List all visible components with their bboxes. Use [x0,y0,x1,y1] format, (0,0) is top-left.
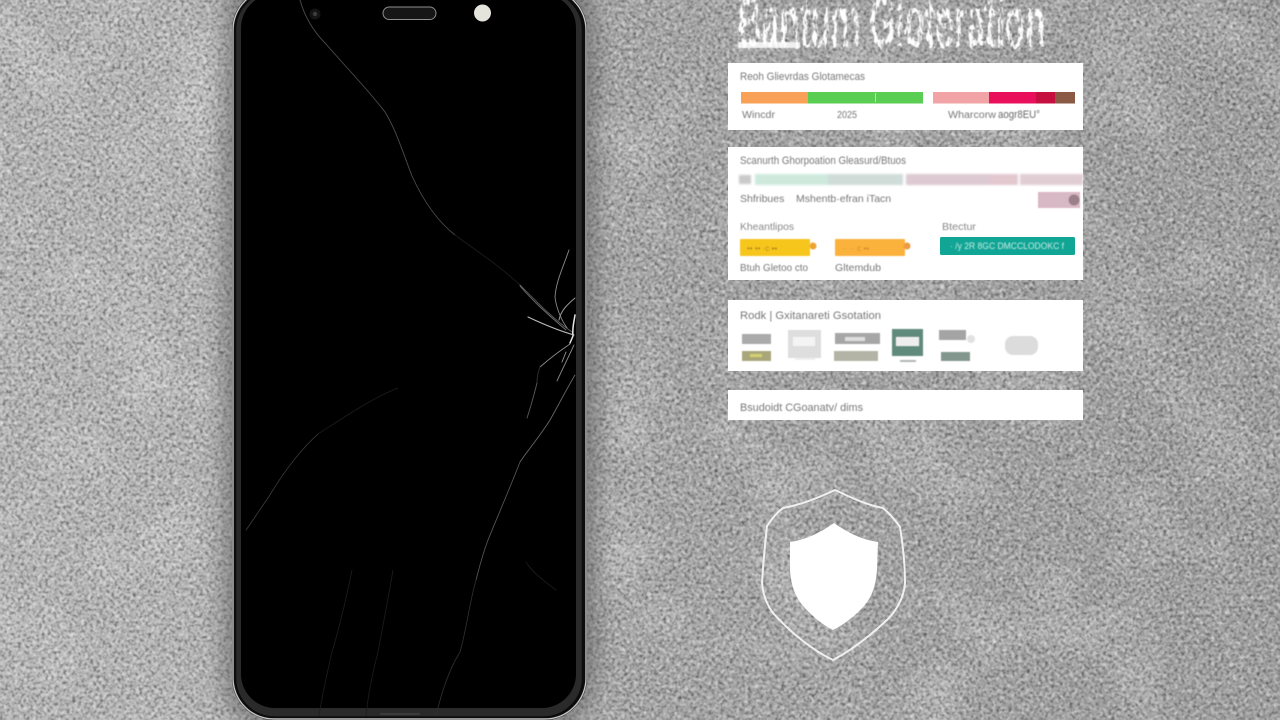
button captions: Btuh Gletoo cto [740,262,808,274]
panel heading: Reoh Glievrdas Glotamecas [740,71,865,83]
sub labels: Shfribues [740,193,784,205]
thumbnail group 2 [788,330,821,360]
front camera [310,8,320,20]
phone with cracked screen [222,0,598,720]
left segmented bar [741,92,923,104]
panel: footer note [728,390,1083,420]
thumbnail group 6 [1005,336,1038,355]
column labels: Kheantlipos [740,221,794,233]
thumbnail group 5 [939,330,975,361]
bar labels: 2025 [837,110,857,121]
title [738,0,1046,63]
panel heading: Rodk | Gxitanareti Gsotation [740,310,881,322]
panel heading: Scanurth Ghorpoation Gleasurd/Btuos [740,155,906,167]
faded status strip [739,174,1083,185]
proximity light [474,4,491,22]
small pink chip [1038,192,1080,208]
bar labels: Wincdr [742,110,776,121]
thumbnail group 3 [834,333,880,361]
panel: repair options: Btectur [942,221,977,233]
icon: shield [762,490,905,660]
teal status button [940,237,1075,255]
panel text: Bsudoidt CGoanatv/ dims [740,402,863,414]
yellow button [740,239,816,256]
thumbnail group 4 [892,329,923,362]
panel: repair options [728,147,1083,280]
bottom bezel highlight [380,713,420,715]
orange button: ·· ·· c ▪▪ [842,244,869,253]
yellow button: •• •• ·c ▪▪ [747,244,777,253]
sub labels: Mshentb·efran iTacn [796,193,891,205]
panel: repair options: Gltemdub [835,262,881,274]
shield outline [762,490,905,660]
thumbnail group 1 [742,334,771,361]
panel: component thumbnails [728,300,1083,371]
solid shield [790,523,878,630]
orange button [835,239,910,256]
panel: battery and damage gauges [728,63,1083,130]
right segmented bar [933,92,1075,104]
phone screen [241,0,576,708]
phone drop shadow [222,0,598,720]
speaker slot [383,7,436,20]
bar labels: Wharcorw [948,110,997,121]
phone body [232,0,587,720]
bar labels: aogr8EU° [998,109,1040,121]
bar labels [742,109,1040,121]
teal status button: · /y 2R 8GC DMCCLODOKC f [950,241,1064,252]
screen cracks [246,0,575,716]
